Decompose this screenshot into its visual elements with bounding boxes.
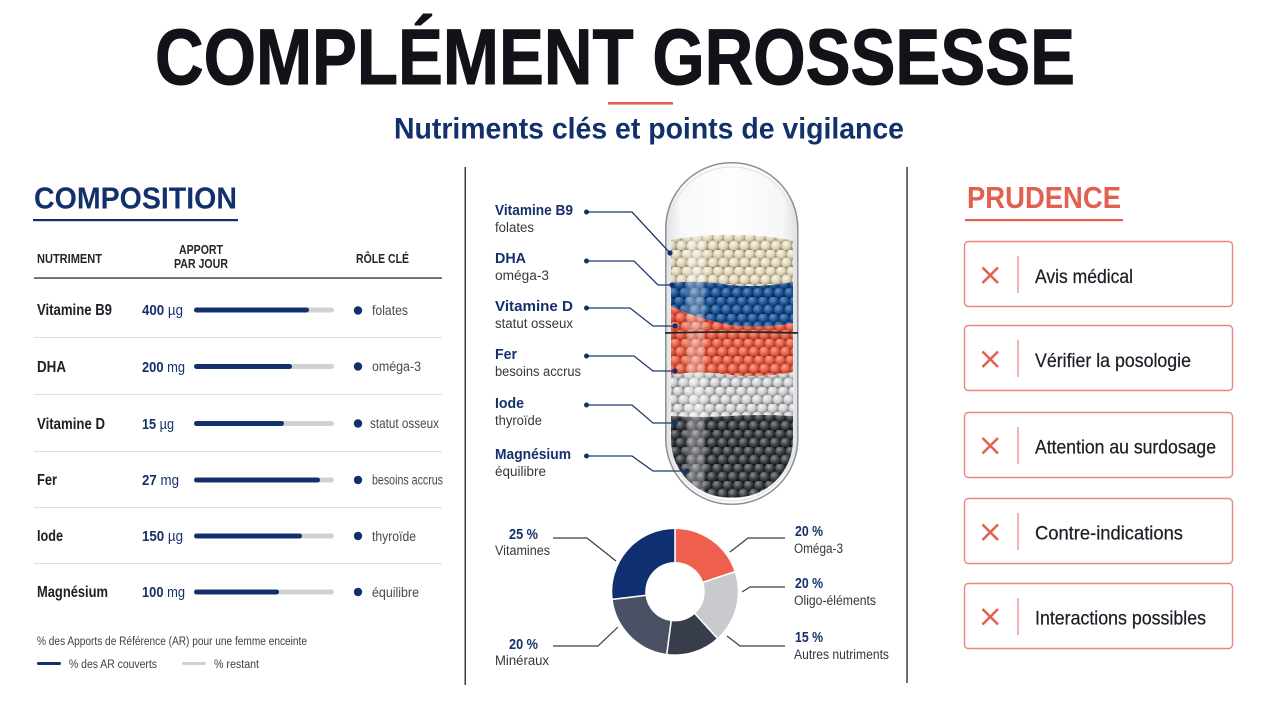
heading: composition: COMPOSITION [34,180,237,216]
callout: magnésium: Magnésium [495,446,571,463]
donut label: minéraux [495,627,618,668]
row: fer: 27 mg [142,472,179,489]
callout: fer: besoins accrus [495,364,581,379]
row: fer: Fer [37,472,57,489]
donut label: autres nutriments: Autres nutriments [794,647,889,662]
callout: magnésium [495,446,690,479]
row: vitamine B9: 400 µg [142,302,183,319]
bead layers [671,235,793,500]
footnote: % des Apports de Référence (AR) pour une femme enceinte [37,636,307,648]
row: magnésium: 100 mg [142,584,185,601]
row: vitamine D: statut osseux [370,416,439,431]
callout: iode: Iode [495,395,524,412]
warning: avis médical [964,242,1232,306]
row: vitamine B9: Vitamine B9 [37,302,112,319]
callout: vitamine B9: Vitamine B9 [495,202,573,219]
warning: attention au surdosage [964,412,1232,478]
warning: interactions possibles: Interactions possibles [1035,608,1206,630]
donut label: oméga-3 [730,523,843,556]
callout: magnésium: équilibre [495,464,546,479]
legend [37,659,260,671]
warning: attention au surdosage: Attention au surdosage [1035,436,1216,458]
legend: % des AR couverts [69,659,157,671]
callout: vitamine D: Vitamine D [495,298,573,315]
row: iode: thyroïde [372,529,416,544]
row: DHA: DHA [37,359,66,376]
donut label: autres nutriments: 15 % [795,629,823,646]
row: fer [37,472,443,489]
row: iode: 150 µg [142,528,183,545]
subtitle: Nutriments clés et points de vigilance [394,112,904,146]
callout: fer: Fer [495,346,517,363]
row: iode: Iode [37,528,63,545]
donut label: minéraux: 20 % [509,636,538,653]
capsule illustration [665,162,798,505]
row: vitamine B9 [37,302,408,319]
row: magnésium [37,584,419,601]
donut label: minéraux: Minéraux [495,653,549,668]
row: vitamine D: Vitamine D [37,416,105,433]
table header: RÔLE CLÉ [356,251,409,266]
warning: contre-indications: Contre-indications [1035,522,1183,544]
callout: vitamine B9: folates [495,220,534,235]
row: DHA: oméga-3 [372,359,421,374]
title: COMPLÉMENT GROSSESSE [155,12,1075,101]
donut label: oligo-éléments [742,575,876,608]
warning: avis médical: Avis médical [1035,266,1133,288]
warning: interactions possibles [964,584,1232,648]
callout: vitamine D [495,298,678,331]
row: vitamine D [37,416,439,433]
table header: PAR JOUR [174,257,228,271]
row: iode [37,528,416,545]
table header: APPORT [179,243,223,257]
callout: vitamine B9 [495,202,673,256]
warning: vérifier la posologie: Vérifier la posologie [1035,350,1191,372]
donut label: vitamines: 25 % [509,526,538,543]
donut chart [612,528,738,655]
callout: DHA: oméga-3 [495,268,549,283]
warning: vérifier la posologie [964,326,1232,390]
legend: % restant [214,659,260,671]
donut label: autres nutriments [727,629,889,662]
donut label: oligo-éléments: 20 % [795,575,823,592]
callout: fer [495,346,678,379]
heading: prudence: PRUDENCE [967,180,1121,215]
panel: prudence [964,180,1232,648]
title accent rule [608,102,673,105]
row: vitamine B9: folates [372,303,408,318]
row: DHA: 200 mg [142,359,185,376]
donut label: oligo-éléments: Oligo-éléments [794,593,876,608]
callout: DHA: DHA [495,250,526,267]
row: magnésium: Magnésium [37,584,108,601]
table header: NUTRIMENT [37,252,102,266]
donut label: oméga-3: Oméga-3 [794,541,843,556]
callout: vitamine D: statut osseux [495,316,573,331]
row: DHA [37,359,421,376]
donut label: oméga-3: 20 % [795,523,823,540]
callout: iode [495,395,678,428]
warning: contre-indications [964,498,1232,564]
callout: DHA [495,250,675,288]
row: fer: besoins accrus [372,472,443,488]
callout: iode: thyroïde [495,413,542,428]
table header [34,243,442,279]
donut label: vitamines [495,526,616,561]
row: vitamine D: 15 µg [142,416,174,433]
donut label: vitamines: Vitamines [495,543,550,558]
callouts: capsule labels [495,202,690,479]
row: magnésium: équilibre [372,585,419,600]
panel: composition [33,180,443,671]
